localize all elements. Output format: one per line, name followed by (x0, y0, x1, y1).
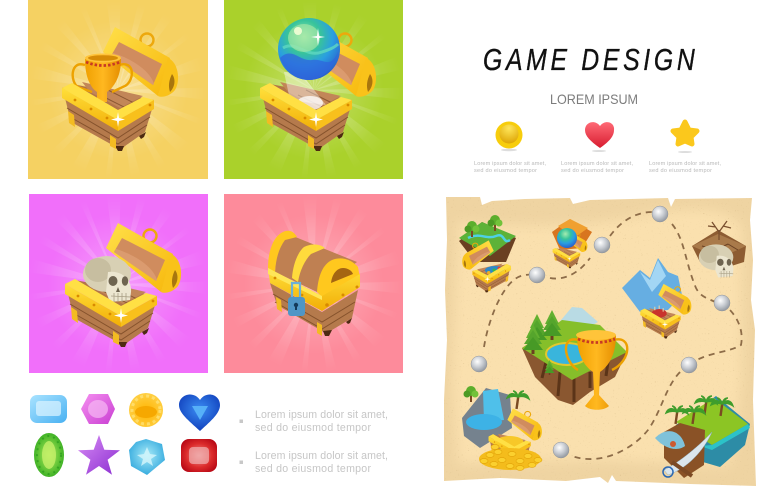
coins pile (479, 445, 542, 470)
text block: gem note 1 (240, 409, 388, 434)
text block: gem note 2: sed do eiusmod tempor (255, 463, 371, 475)
icon: gold cup (566, 330, 627, 410)
gem: orange round (129, 393, 163, 427)
text block: coin caption: Lorem ipsum dolor sit amet, (474, 161, 546, 167)
panel: salmon closed chest with padlock (224, 194, 403, 373)
text block: coin caption (474, 161, 546, 174)
dashed route (484, 212, 742, 459)
text block: gem note 2 (240, 450, 388, 475)
map nodes (471, 206, 730, 458)
gem: purple star (78, 435, 120, 475)
island: ice with treasure chest (622, 258, 691, 338)
text block: gem note 2: Lorem ipsum dolor sit amet, (255, 450, 388, 462)
island: dead land with skull (692, 221, 746, 277)
icon: coin (496, 122, 522, 151)
text block: star caption: Lorem ipsum dolor sit amet, (649, 161, 721, 167)
panel: parchment map (440, 190, 760, 490)
gem: cyan pentagon (129, 439, 165, 475)
icon: shield and sword (655, 423, 712, 478)
island: central lake with golden cup (522, 307, 627, 410)
icon: padlock (288, 283, 305, 316)
text block: heart caption (561, 161, 633, 174)
gem: pink hexagon (81, 394, 115, 424)
text block: gem note 1: sed do eiusmod tempor (255, 422, 371, 434)
text block: heart caption: Lorem ipsum dolor sit amet, (561, 161, 633, 167)
text block: heart caption: sed do eiusmod tempor (561, 168, 624, 174)
text block: gem note 1: Lorem ipsum dolor sit amet, (255, 409, 388, 421)
text block: coin caption: sed do eiusmod tempor (474, 168, 537, 174)
island: canyon with orb chest (552, 219, 592, 268)
island: palm beach with shield and sword (655, 396, 750, 478)
island: forest with gem chest (459, 215, 516, 292)
panel: green chest with magic orb (224, 0, 403, 179)
icon: star (673, 122, 697, 153)
panel: yellow chest with trophy (28, 0, 208, 179)
title: GAME DESIGN (483, 42, 698, 77)
island: waterfall with coin chest (462, 386, 542, 470)
gem: green oval (34, 433, 64, 477)
panel: magenta chest with skull (29, 194, 208, 373)
gem: red square (181, 439, 217, 472)
gem: blue heart (179, 395, 220, 431)
text block: star caption (649, 161, 721, 174)
subtitle: LOREM IPSUM (550, 91, 638, 107)
icon: heart (585, 122, 614, 152)
text block: star caption: sed do eiusmod tempor (649, 168, 712, 174)
gem: light blue (30, 395, 67, 423)
